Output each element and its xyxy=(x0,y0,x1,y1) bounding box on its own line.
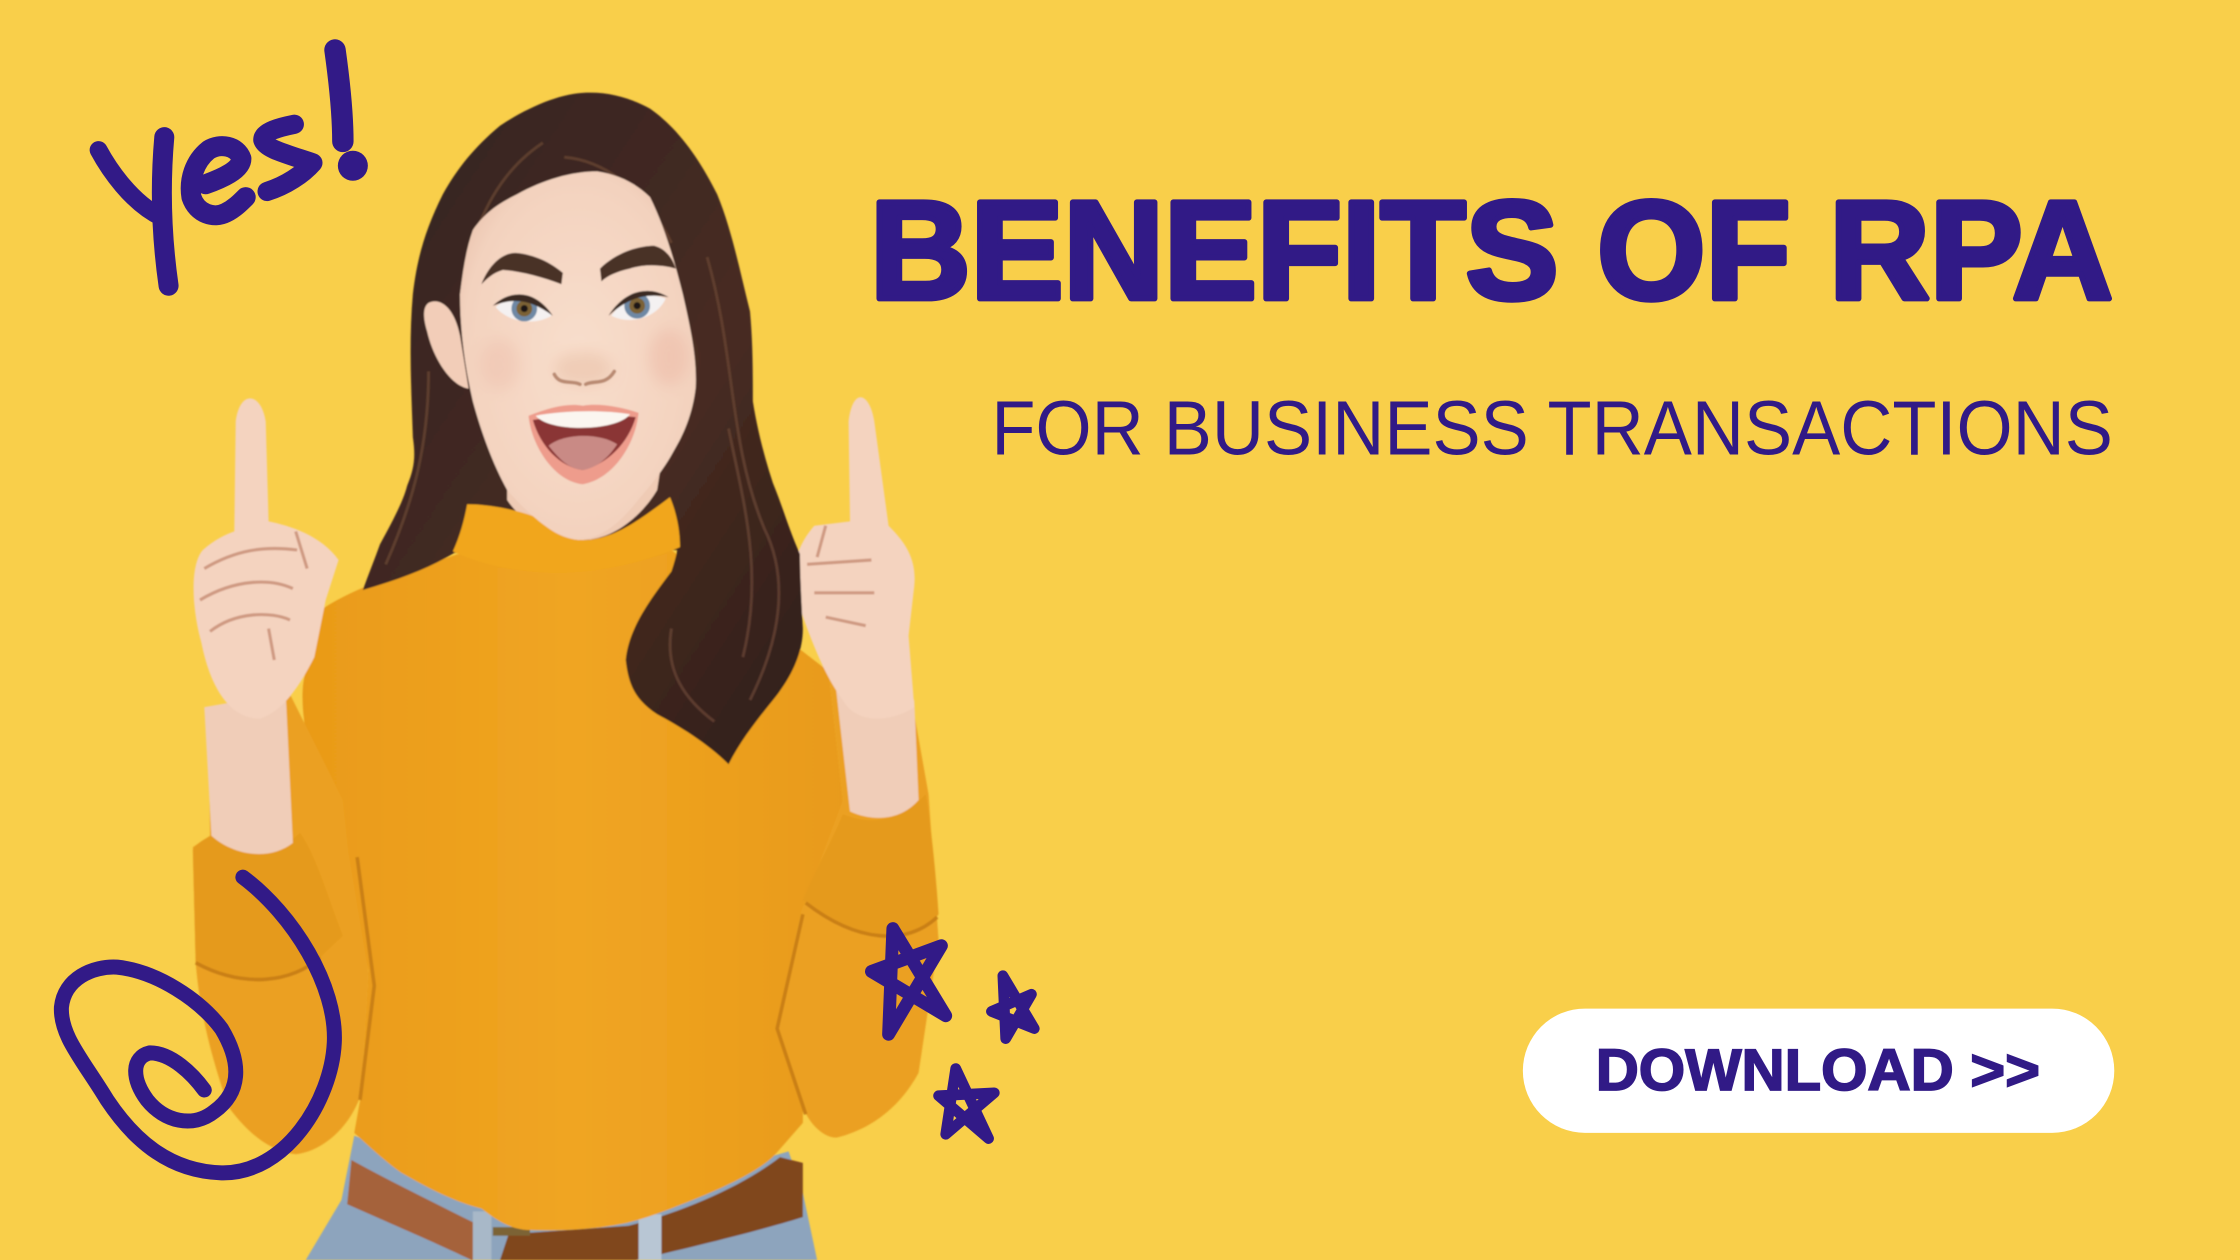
letter s xyxy=(263,124,313,191)
right forearm xyxy=(836,686,919,818)
right eyebrow xyxy=(600,246,676,281)
neck xyxy=(507,443,664,540)
turtleneck collar xyxy=(453,497,680,573)
title: BENEFITS OF RPA xyxy=(870,172,2113,329)
hair xyxy=(363,93,803,764)
right hand xyxy=(794,397,915,719)
left forearm xyxy=(204,693,293,854)
leather belt xyxy=(347,1157,803,1260)
ear xyxy=(424,301,469,389)
left eyebrow xyxy=(481,253,563,284)
star doodle right xyxy=(991,976,1034,1039)
exclamation mark xyxy=(335,50,343,141)
face xyxy=(460,171,696,540)
left cuff xyxy=(193,833,343,979)
hair highlights xyxy=(386,143,779,721)
yes! hand lettering xyxy=(99,50,368,286)
sweater body xyxy=(303,550,843,1230)
nose xyxy=(554,351,614,386)
cheek blush xyxy=(480,329,689,390)
star doodle lower xyxy=(939,1069,994,1139)
left eye xyxy=(493,294,553,322)
download button xyxy=(1523,1009,2114,1133)
right eye xyxy=(609,291,669,320)
jeans xyxy=(306,1136,817,1260)
left hand xyxy=(194,398,339,719)
woman pointing upward xyxy=(193,93,939,1260)
mouth xyxy=(529,405,639,484)
left sleeve xyxy=(193,686,369,1154)
spiral doodle xyxy=(61,877,334,1173)
subtitle: FOR BUSINESS TRANSACTIONS xyxy=(991,385,2113,471)
download button: DOWNLOAD >> xyxy=(1596,1038,2040,1103)
right sleeve xyxy=(776,671,939,1138)
letter y xyxy=(99,150,161,217)
star doodle large xyxy=(871,929,946,1034)
sleeve creases xyxy=(196,857,937,1114)
right cuff xyxy=(803,794,939,938)
letter e xyxy=(191,146,246,215)
